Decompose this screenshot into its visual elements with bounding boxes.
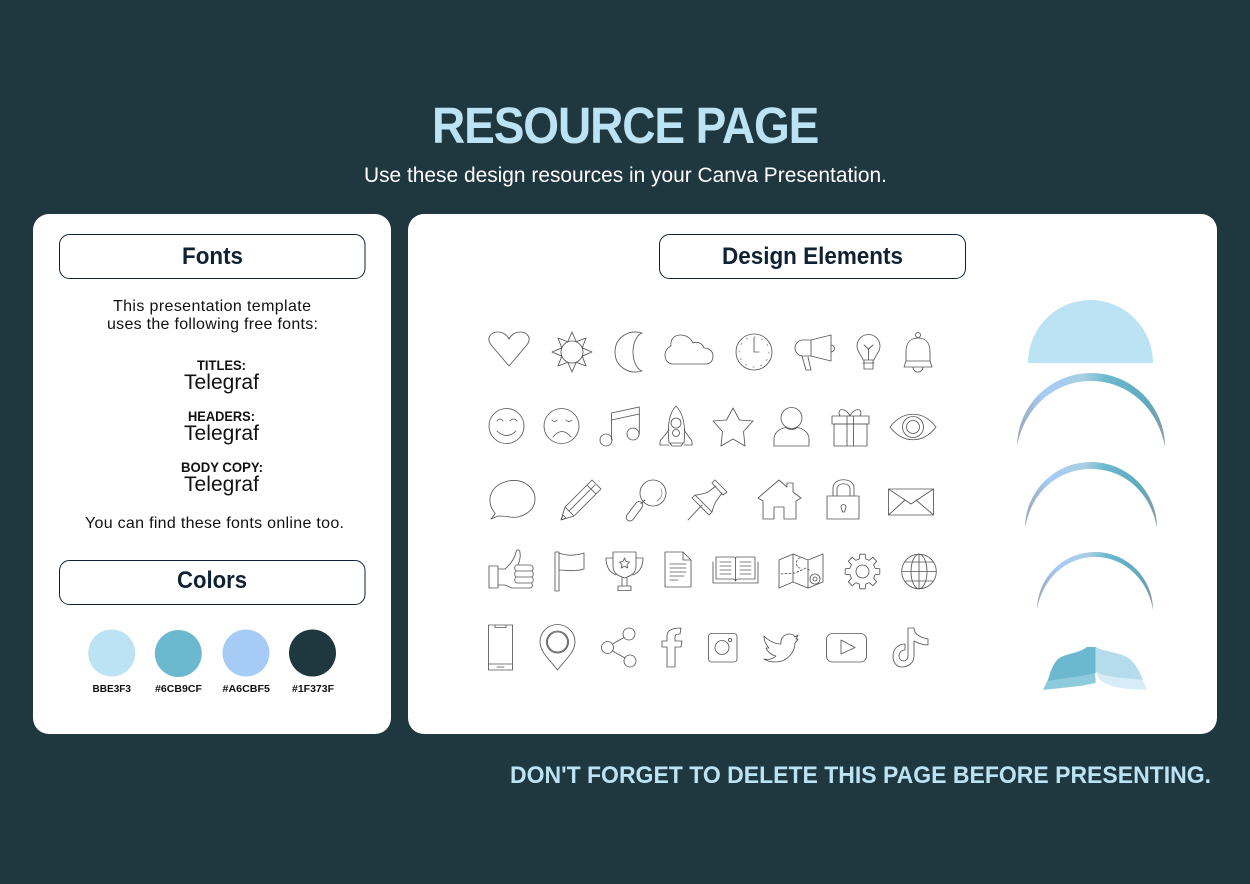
icon: location pin — [540, 624, 575, 670]
icon: clock — [736, 334, 772, 370]
icon: youtube — [826, 634, 866, 662]
heading: fonts — [60, 234, 365, 278]
swatch: teal: #6CB9CF — [155, 683, 203, 695]
shape: semicircle — [1028, 300, 1153, 363]
text: fonts intro — [107, 298, 318, 333]
icon: flag — [555, 552, 584, 591]
icon: map — [779, 554, 823, 588]
subtitle: Use these design resources in your Canva Presentation. — [364, 164, 887, 187]
icon: smiling face — [489, 408, 524, 444]
heading: design elements — [660, 234, 966, 278]
icon: gift — [832, 410, 869, 446]
text: headers font: Telegraf — [184, 422, 259, 445]
icon: trophy — [606, 552, 643, 590]
icon: open book — [713, 557, 758, 583]
text: headers font — [184, 409, 259, 445]
text: titles font — [184, 358, 259, 394]
icon: padlock — [827, 480, 859, 519]
heading: fonts: Fonts — [182, 243, 243, 270]
heading: design elements: Design Elements — [722, 243, 903, 270]
swatch: light blue: BBE3F3 — [92, 683, 131, 695]
icon: moon — [615, 332, 642, 372]
text: titles font: TITLES: — [197, 358, 246, 373]
icon: thumbs up — [489, 550, 533, 588]
icon: document — [665, 552, 691, 587]
text: body copy font: Telegraf — [184, 473, 259, 496]
text: titles font: Telegraf — [184, 371, 259, 394]
text: fonts intro: This presentation template — [113, 298, 311, 315]
icon: house — [758, 480, 801, 519]
swatch: light blue — [88, 630, 135, 695]
shape: folded wave — [1043, 647, 1147, 690]
icon: sun — [552, 332, 592, 372]
icon: light bulb — [857, 335, 880, 369]
text: headers font: HEADERS: — [188, 409, 255, 424]
heading: colors: Colors — [177, 567, 247, 594]
heading: colors — [60, 560, 365, 604]
shape: medium crescent arc — [1025, 462, 1157, 528]
icon: gear — [845, 554, 880, 589]
shape: small crescent arc — [1037, 552, 1153, 610]
icon: tiktok — [893, 628, 928, 667]
icon: eye — [890, 414, 936, 440]
icon: envelope — [888, 489, 934, 515]
icon: megaphone — [795, 335, 835, 370]
swatch: periwinkle: #A6CBF5 — [222, 683, 270, 695]
icon: share — [602, 628, 636, 667]
text: fonts intro: uses the following free fonts: — [107, 316, 318, 333]
icon: twitter — [764, 634, 798, 662]
swatch: teal — [155, 630, 203, 695]
icon: star — [713, 408, 753, 446]
swatch: periwinkle — [222, 630, 270, 695]
swatch: dark — [289, 630, 336, 695]
text: body copy font — [181, 460, 263, 496]
shape: large crescent arc — [1017, 373, 1165, 447]
icon: cloud — [665, 335, 713, 364]
footer reminder: DON'T FORGET TO DELETE THIS PAGE BEFORE PRESENTING. — [510, 762, 1211, 789]
text: body copy font: BODY COPY: — [181, 460, 263, 475]
icon: music note — [600, 407, 639, 446]
panel: fonts and colors — [33, 214, 391, 734]
icon: push pin — [688, 480, 727, 520]
title: RESOURCE PAGE — [432, 98, 818, 155]
icon: pencil — [561, 480, 601, 520]
icon: smartphone — [488, 625, 512, 670]
icon: sad face — [544, 408, 579, 444]
icon: facebook — [662, 628, 682, 667]
text: find fonts note: You can find these fonts online too. — [85, 515, 344, 532]
icon: speech bubble — [490, 480, 535, 519]
icon: heart — [489, 332, 529, 366]
icon: bell — [904, 332, 932, 372]
panel: design elements — [408, 214, 1217, 734]
icon: globe — [902, 554, 936, 589]
swatch: dark: #1F373F — [292, 683, 335, 695]
icon: instagram — [708, 634, 737, 662]
icon: magnifier — [626, 480, 666, 521]
icon: person — [774, 408, 809, 446]
icon: rocket — [660, 406, 692, 446]
